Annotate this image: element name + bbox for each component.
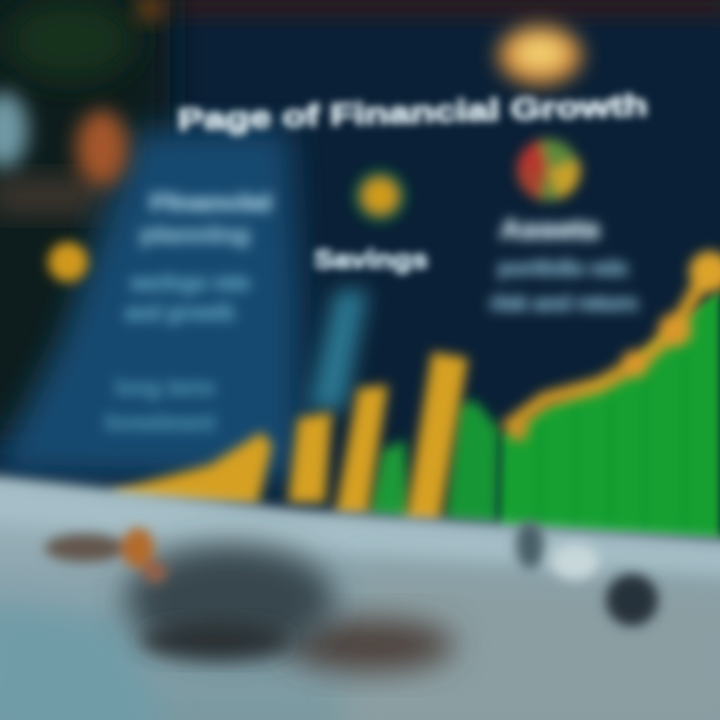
center blue column — [308, 290, 368, 410]
text block: left column: investment — [105, 410, 216, 435]
text block: left column — [105, 190, 272, 435]
icon: small orange top — [136, 0, 164, 22]
text block: left column: and growth — [125, 300, 235, 325]
text block: left column: planning — [140, 222, 250, 247]
title: Page of Financial Growth — [177, 87, 648, 137]
shadow: brown stain — [285, 619, 455, 671]
text block: right column — [490, 214, 638, 315]
text block: right column: Assets — [500, 214, 600, 244]
chart: yellow bars — [110, 352, 468, 522]
panel: blue wedge — [0, 130, 300, 480]
icon: center coin — [353, 169, 407, 223]
chart: yellow trend line — [505, 251, 720, 441]
pen: dark cap and white body — [516, 521, 658, 626]
text block: left column: long term — [115, 375, 215, 400]
chart: green area bars — [368, 290, 720, 540]
icon: top sun glow — [498, 25, 582, 85]
text block: right column: portfolio mix — [498, 258, 628, 280]
text block: center label: Savings — [314, 244, 428, 274]
table surface — [0, 476, 720, 720]
icon: pie chart — [517, 139, 581, 201]
text block: right column: risk and return — [490, 293, 638, 315]
text block: left column: Financial — [150, 190, 272, 215]
icon: yellow coin left — [48, 242, 88, 282]
icon: orange blob — [76, 110, 128, 186]
text block: left column: savings rate — [130, 270, 250, 295]
table edge highlight — [0, 482, 720, 578]
bowl — [125, 545, 335, 658]
orange items — [45, 528, 167, 583]
